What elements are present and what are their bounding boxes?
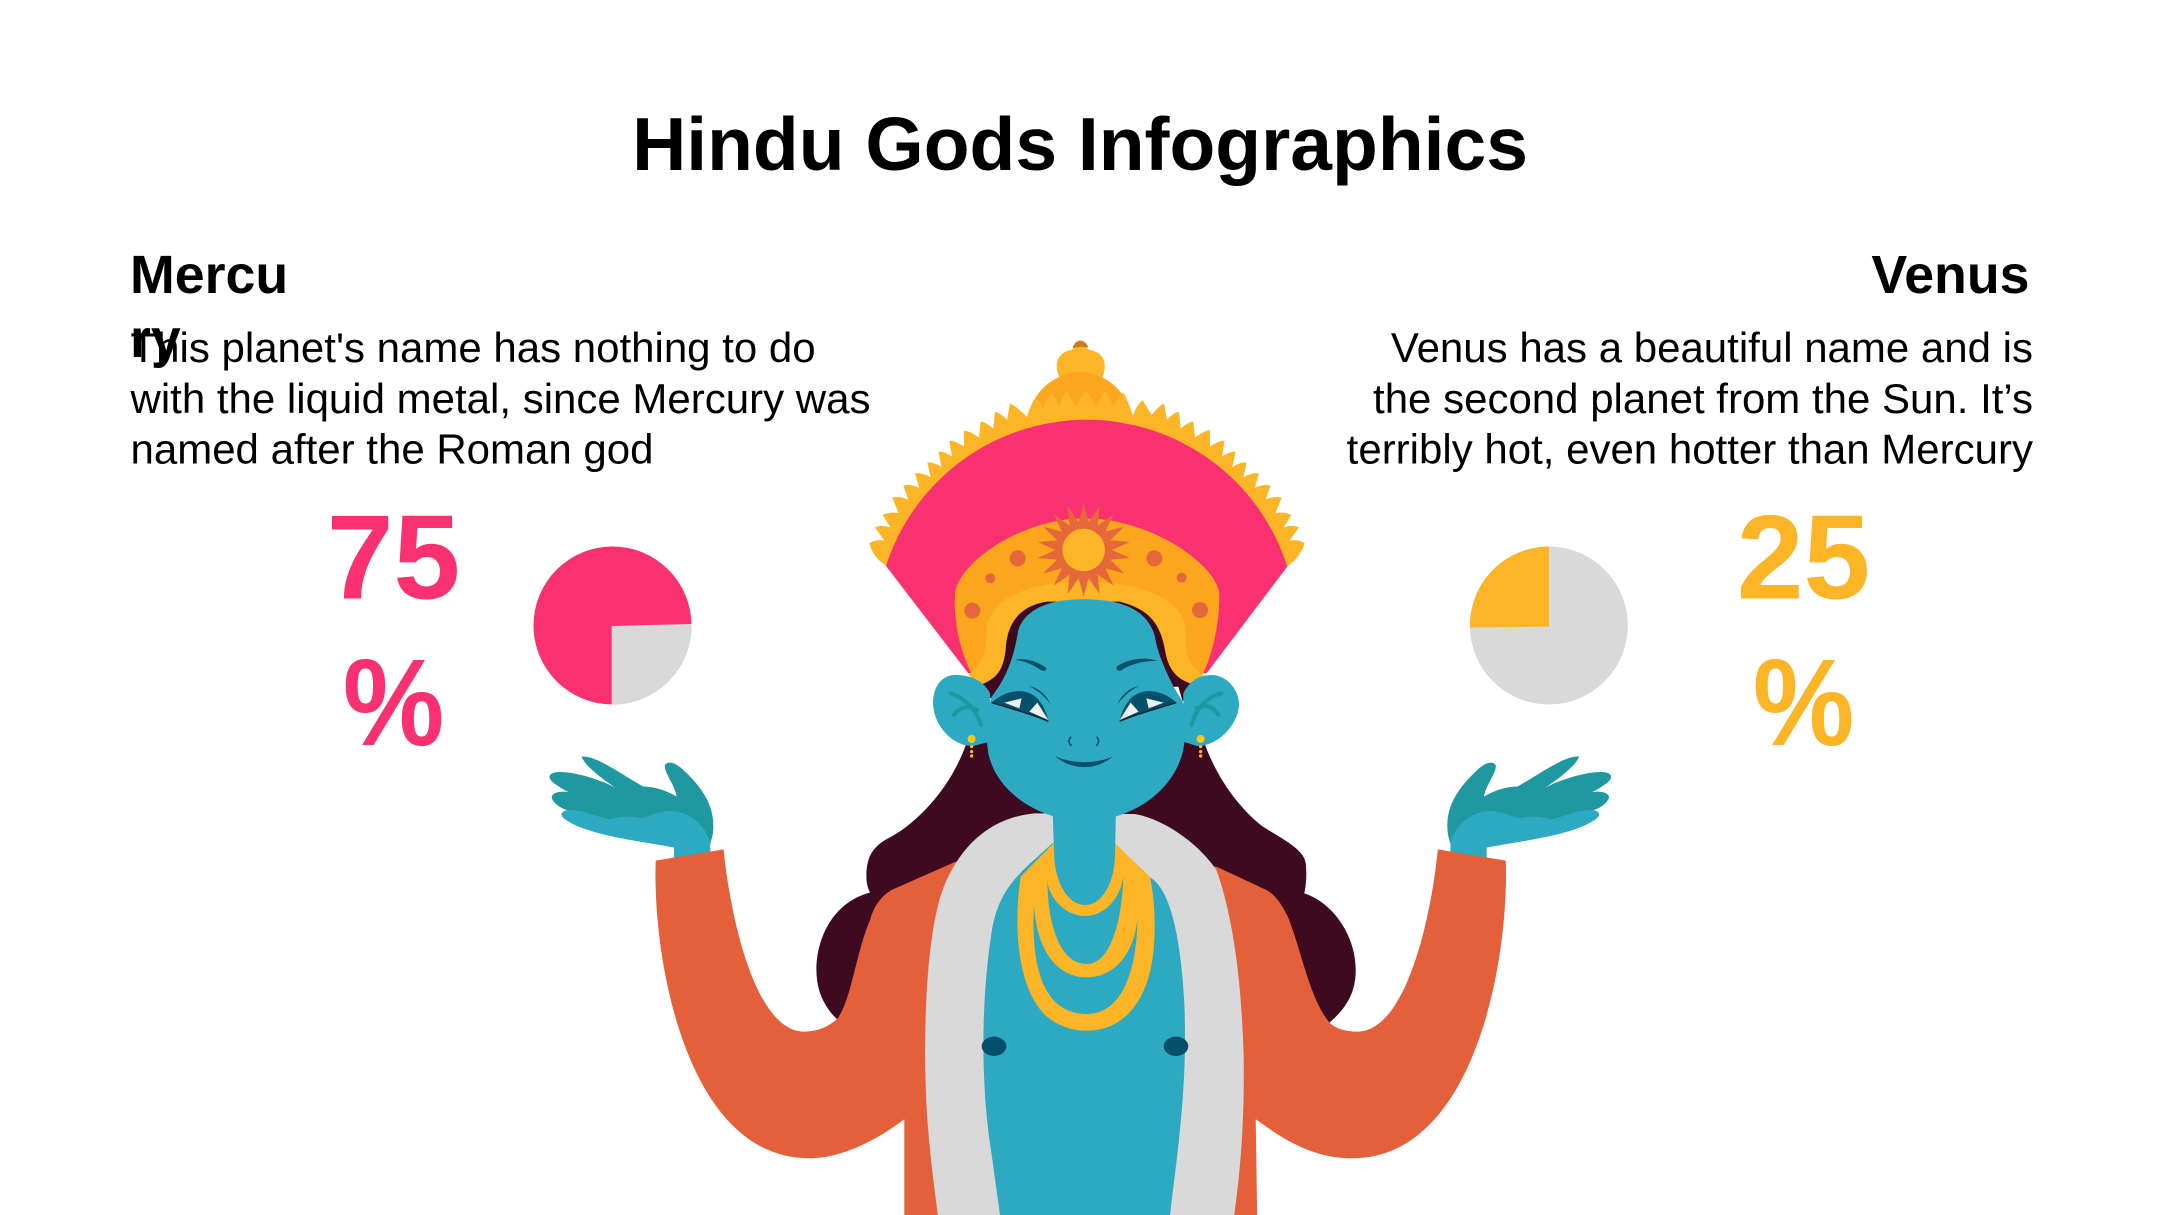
facial features (992, 659, 1176, 767)
heading: Mercury (130, 245, 288, 369)
sun emblem (1038, 503, 1130, 597)
stat: 75%: 75 (327, 490, 460, 624)
pie chart: 25% (1470, 546, 1628, 704)
crown (869, 341, 1305, 687)
robe and sleeves (655, 849, 1506, 1215)
hair fringe (983, 602, 1190, 702)
body text: Mercury (130, 324, 870, 472)
stat: 25%: % (1753, 634, 1854, 772)
ear folds (951, 693, 1222, 725)
headband jewels (964, 550, 1208, 619)
illustration: Hindu god figure (550, 341, 1611, 1215)
stat: 25% (1737, 490, 1870, 772)
body text: Venus (1347, 324, 2033, 472)
crown finial (1073, 341, 1088, 348)
pink fan (886, 420, 1287, 673)
left hand (550, 757, 713, 862)
hair (816, 737, 1356, 1023)
body text: Mercury: with the liquid metal, since Mercury was (130, 375, 870, 422)
headband (955, 518, 1219, 677)
body text: Venus: Venus has a beautiful name and is (1391, 324, 2033, 371)
left ear (933, 675, 990, 746)
head (933, 599, 1239, 822)
right hand (1447, 757, 1611, 862)
left eye (992, 659, 1050, 721)
nose (1069, 737, 1099, 746)
fur collar (925, 813, 1244, 1215)
left earring (968, 735, 976, 758)
body text: Venus: terribly hot, even hotter than Mercury (1347, 426, 2033, 472)
smile (1055, 756, 1113, 767)
heading: Mercury: Mercu (130, 245, 288, 305)
stat: 75% (327, 490, 460, 772)
stat: 25%: 25 (1737, 490, 1870, 624)
body text: Mercury: named after the Roman god (130, 426, 654, 472)
body text: Venus: the second planet from the Sun. It’s (1373, 375, 2033, 422)
pie chart: 75% (534, 546, 692, 705)
necklaces and chest details (982, 810, 1188, 1056)
heading: Mercury: ry (130, 309, 181, 369)
torso (983, 843, 1185, 1215)
face (986, 599, 1186, 822)
right ear (1183, 675, 1239, 746)
stat: 75%: % (343, 634, 444, 772)
title: Hindu Gods Infographics (632, 102, 1528, 186)
right eyebrow (1116, 659, 1157, 671)
body text: Mercury: This planet's name has nothing to do (130, 324, 816, 371)
heading: Venus: Venus (1871, 245, 2030, 305)
crown rim with teeth (869, 400, 1305, 567)
right eye (1118, 686, 1176, 721)
right earring (1197, 735, 1205, 758)
crown dome (1027, 372, 1133, 418)
